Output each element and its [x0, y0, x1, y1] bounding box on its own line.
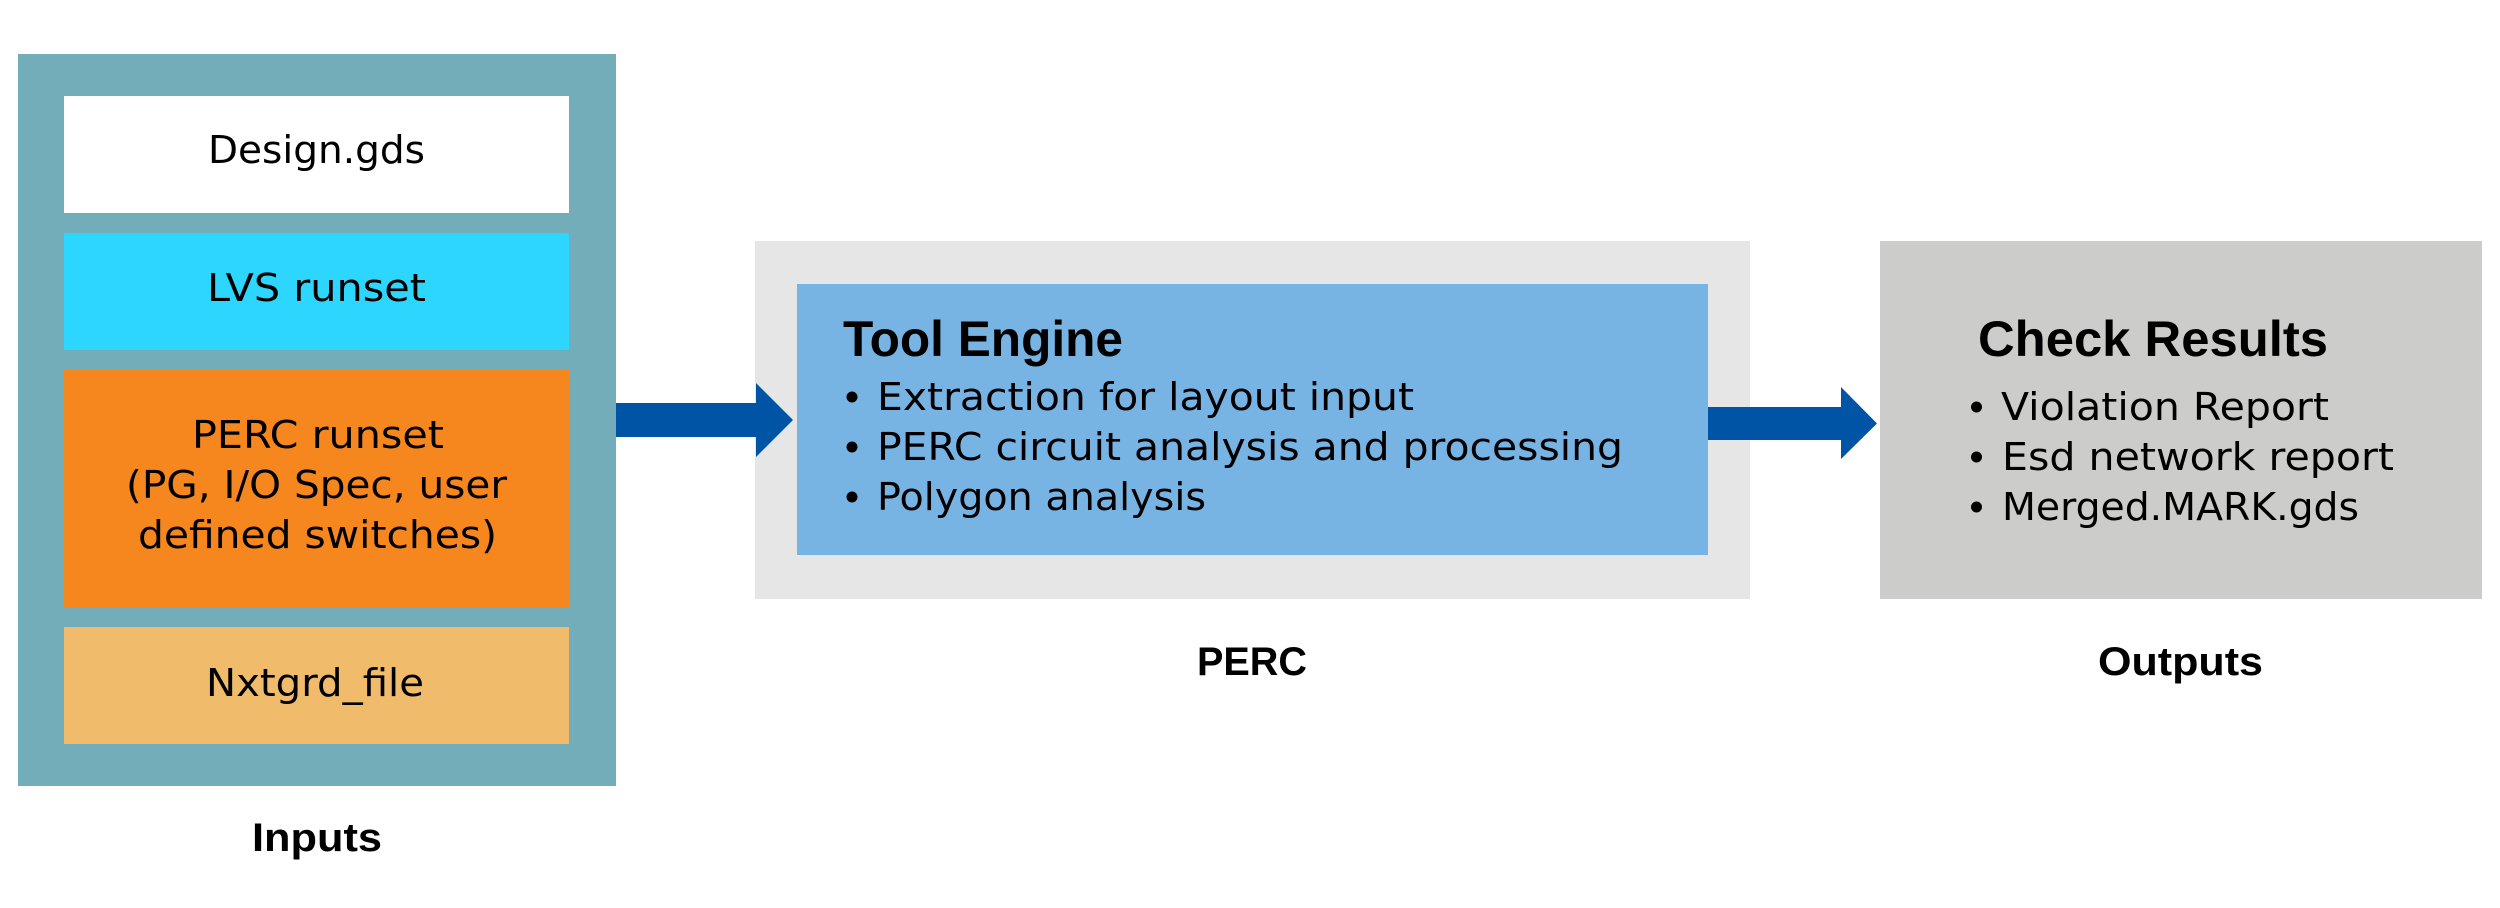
- input box: Design.gds: Design.gds: [208, 128, 425, 172]
- panel: tool engine: [797, 284, 1708, 555]
- tool engine bullet list: Extraction for layout input: [877, 375, 1414, 419]
- input box: PERC runset: (PG, I/O Spec, user: [126, 463, 507, 507]
- input box: PERC runset: defined switches): [138, 513, 497, 557]
- outputs bullet list: Violation Report: [2001, 385, 2329, 429]
- heading: Tool Engine: Tool Engine: [843, 311, 1123, 367]
- label: Inputs: Inputs: [252, 816, 382, 860]
- label: PERC: PERC: [1197, 640, 1307, 684]
- input box: Nxtgrd_file: Nxtgrd_file: [206, 661, 424, 705]
- arrow: inputs to PERC: [616, 383, 793, 457]
- input box: Nxtgrd_file: [64, 627, 569, 744]
- panel: outputs: [1880, 241, 2482, 599]
- input box: LVS runset: [64, 233, 569, 350]
- panel: inputs: [18, 54, 616, 786]
- arrow: PERC to outputs: [1708, 387, 1877, 459]
- input box: LVS runset: LVS runset: [207, 266, 426, 310]
- input box: PERC runset: [64, 370, 569, 607]
- label: Outputs: Outputs: [2098, 640, 2263, 684]
- input box: PERC runset: PERC runset: [192, 413, 444, 457]
- outputs bullet list: Esd network report: [2002, 435, 2394, 479]
- tool engine bullet list: [846, 375, 1623, 519]
- tool engine bullet list: PERC circuit analysis and processing: [877, 425, 1623, 469]
- heading: Check Results: Check Results: [1978, 311, 2328, 367]
- panel: PERC: [755, 241, 1750, 599]
- input box: Design.gds: [64, 96, 569, 213]
- outputs bullet list: [1971, 385, 2394, 529]
- tool engine bullet list: Polygon analysis: [877, 475, 1206, 519]
- outputs bullet list: Merged.MARK.gds: [2002, 485, 2359, 529]
